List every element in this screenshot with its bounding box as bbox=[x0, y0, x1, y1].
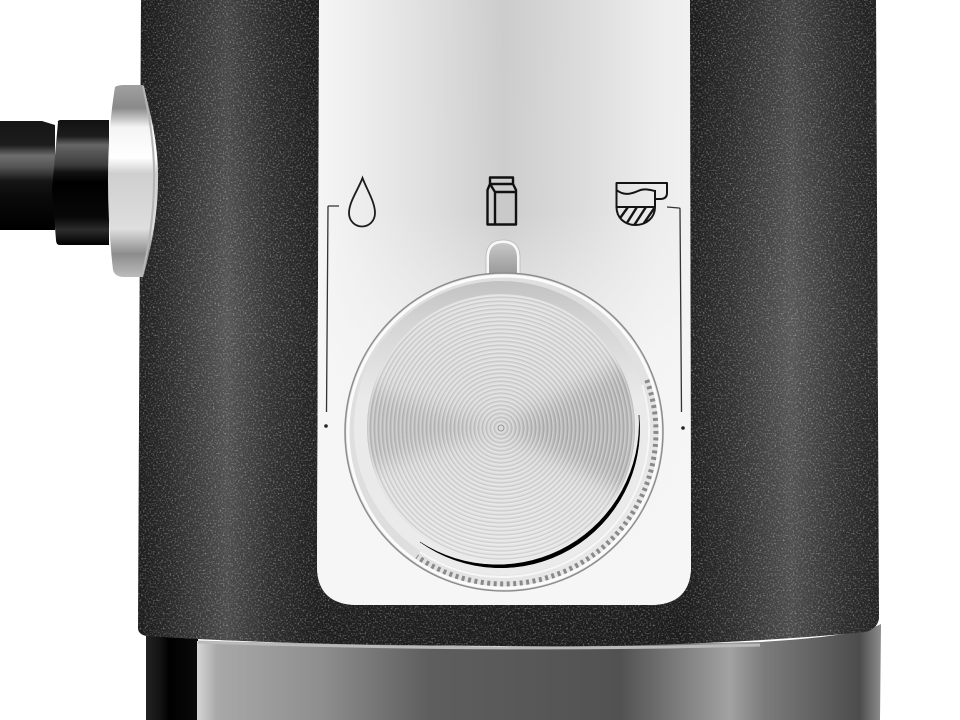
grey base band bbox=[197, 624, 881, 720]
disk base bbox=[367, 294, 635, 562]
knurled band highlight bbox=[420, 385, 649, 577]
panel fade bbox=[317, 0, 691, 605]
lower housing bbox=[146, 624, 881, 720]
knurled teeth bbox=[417, 380, 656, 584]
right dot bbox=[681, 426, 685, 430]
icon: milk carton bbox=[488, 178, 516, 224]
body shading bbox=[138, 0, 880, 650]
left bracket bbox=[326, 206, 339, 412]
left dot bbox=[324, 424, 328, 428]
speckle texture bbox=[138, 0, 880, 650]
control panel bbox=[317, 0, 691, 605]
left shade sector bbox=[367, 384, 488, 471]
cup outline bbox=[616, 183, 667, 225]
black tube bbox=[0, 121, 55, 230]
carton front panel bbox=[495, 191, 516, 224]
inner bevel bbox=[354, 281, 648, 575]
cord connector bbox=[0, 85, 158, 277]
base top highlight bbox=[198, 642, 760, 648]
panel plate bbox=[317, 0, 691, 605]
knurled outer rim bbox=[345, 273, 663, 591]
carton fold bbox=[490, 184, 516, 224]
engraved face bbox=[360, 294, 642, 562]
carton outline bbox=[488, 178, 516, 224]
handle inner wall bbox=[654, 190, 656, 199]
right bracket bbox=[667, 207, 682, 412]
black collar bbox=[52, 120, 109, 245]
concentric grooves bbox=[367, 294, 635, 562]
disk shadow crescent bbox=[420, 415, 640, 568]
notch fill bbox=[489, 243, 517, 274]
dial pointer notch bbox=[486, 240, 520, 274]
foam line bbox=[616, 189, 655, 194]
chrome ring bbox=[108, 85, 158, 277]
right shade sector bbox=[505, 360, 635, 496]
textured dark body bbox=[138, 0, 880, 650]
center point bbox=[498, 425, 504, 431]
icon: water drop bbox=[349, 178, 375, 226]
carton shoulder bbox=[490, 183, 513, 185]
coffee level bbox=[616, 206, 655, 208]
notch outline bbox=[486, 240, 520, 274]
rotary dial bbox=[345, 273, 663, 591]
body shell bbox=[138, 0, 879, 646]
black pillar bbox=[146, 632, 198, 720]
ring edge shadow bbox=[142, 86, 154, 276]
rim highlight bbox=[348, 276, 660, 588]
icon: coffee cup bbox=[616, 183, 667, 227]
coffee hatching bbox=[620, 208, 654, 224]
